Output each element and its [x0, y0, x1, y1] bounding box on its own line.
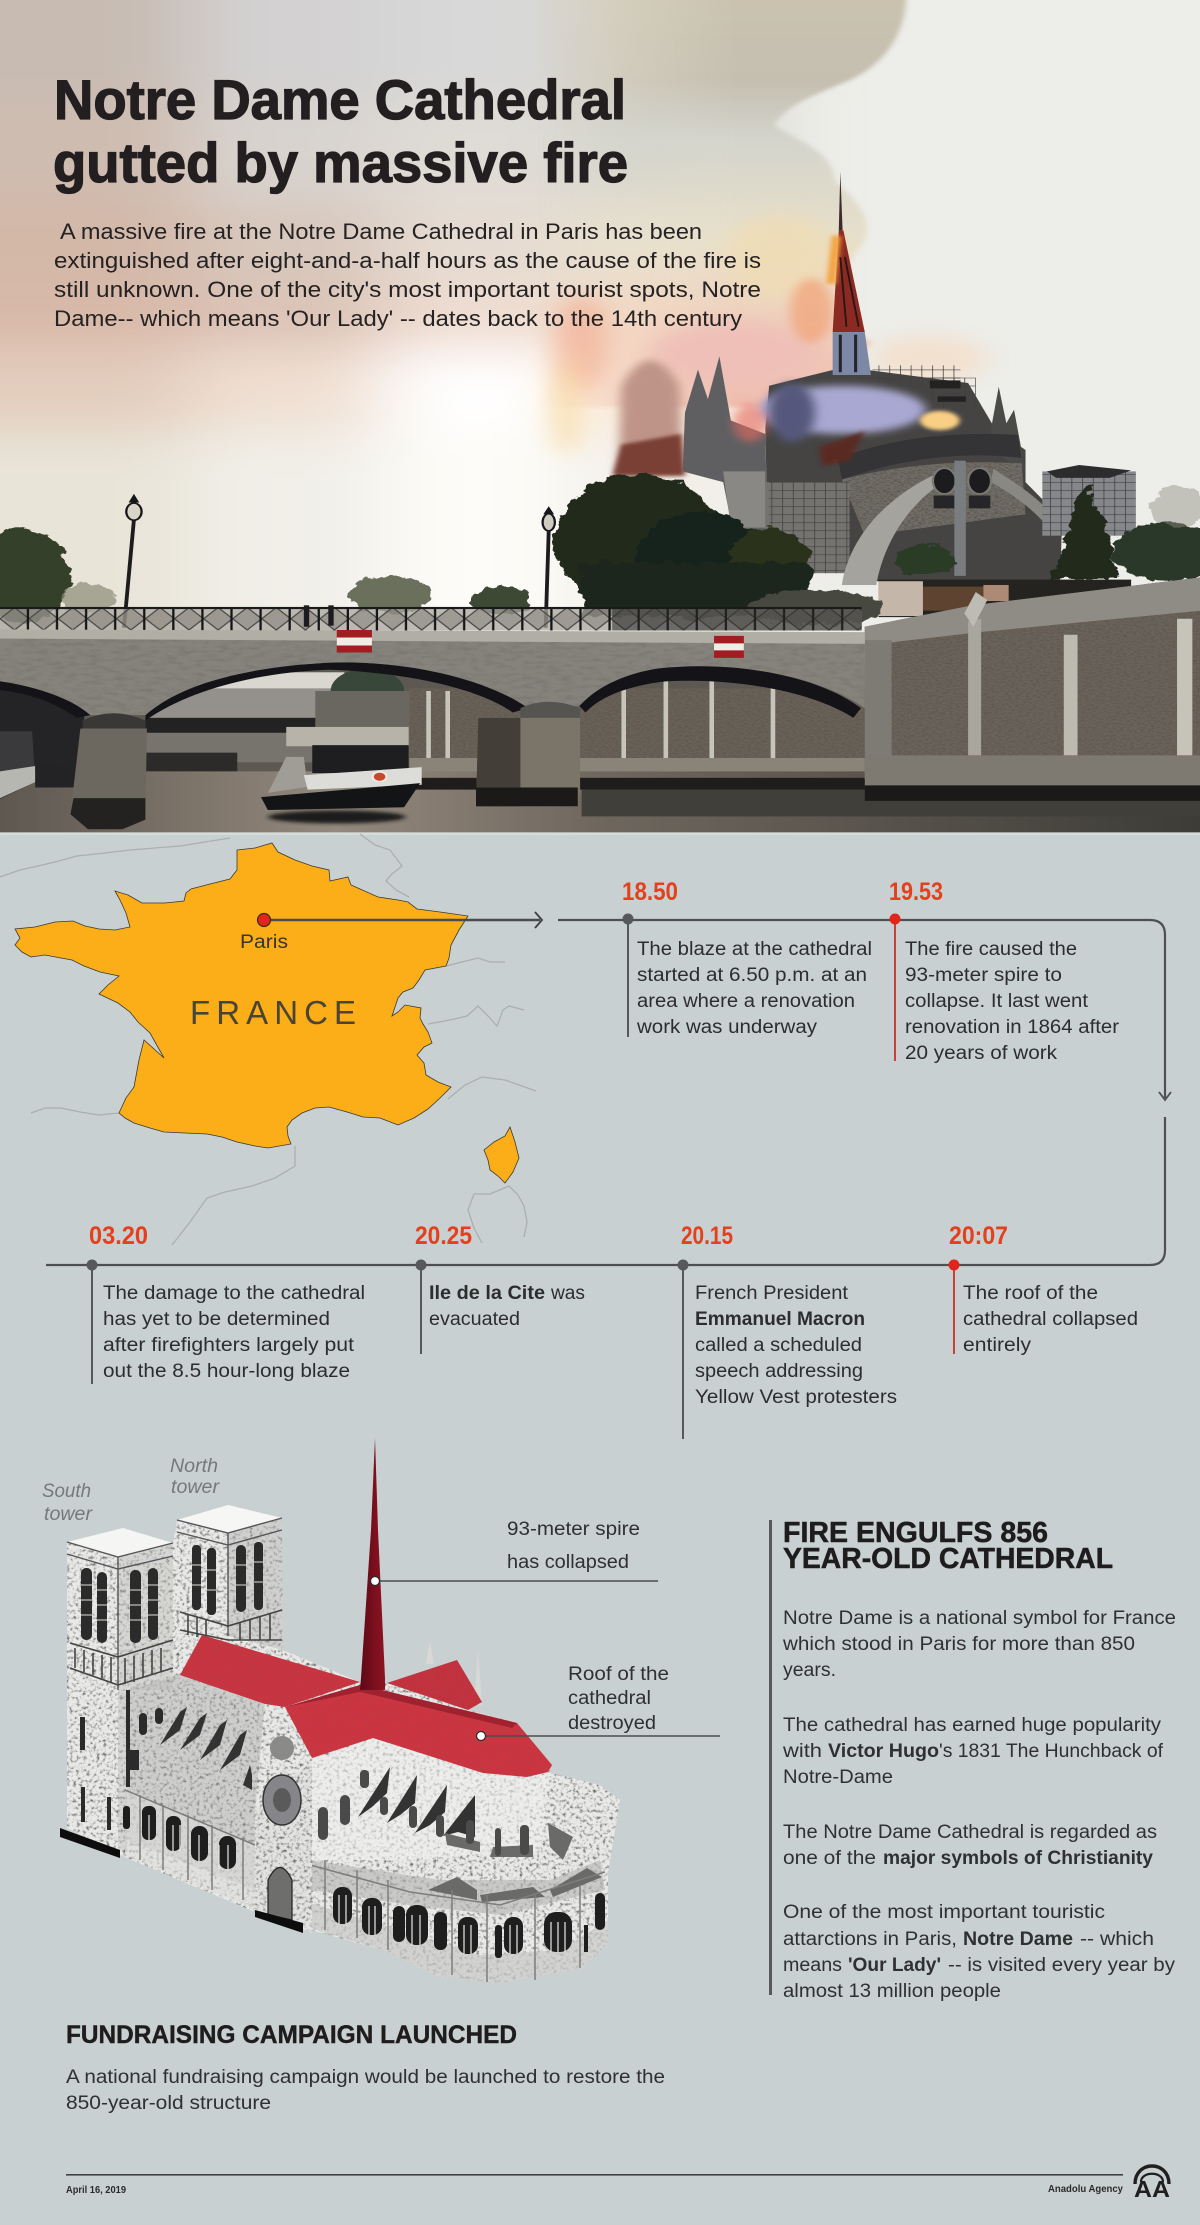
cathedral illustration	[60, 1438, 620, 1983]
timeline event 18.50: work was underway	[636, 1017, 818, 1038]
timeline event 19.53: 20 years of work	[905, 1043, 1058, 1064]
photo bottom edge	[0, 832, 1200, 835]
title: Notre Dame Cathedral	[54, 68, 626, 131]
roof ridge shadows	[285, 1685, 517, 1728]
tower outlines	[67, 1518, 282, 1690]
side panel heading	[783, 1517, 1113, 1575]
timeline event 03.20: has yet to be determined	[103, 1309, 330, 1330]
fundraising text: 850-year-old structure	[66, 2093, 271, 2114]
choir flying buttress gaps	[358, 1767, 475, 1837]
tower labels: tower	[44, 1503, 94, 1525]
timeline event 18.50: started at 6.50 p.m. at an	[637, 965, 867, 986]
intro text: still unknown. One of the city's most important tourist spots, Notre	[54, 277, 761, 302]
hero photo: cathedral on fire seen from the Seine	[0, 0, 1200, 833]
nave lower band	[125, 1790, 255, 1910]
timeline event 19.53: renovation in 1864 after	[905, 1017, 1120, 1038]
side panel paragraphs	[782, 1608, 1176, 2002]
bridge with arches and piers	[0, 607, 865, 829]
callout: roof: Roof of the	[568, 1664, 669, 1685]
timeline event 20.15: speech addressing	[695, 1361, 863, 1382]
tower labels	[42, 1455, 221, 1525]
fundraising text: A national fundraising campaign would be launched to restore the	[66, 2067, 665, 2088]
callout: spire: has collapsed	[507, 1552, 629, 1573]
fundraising text	[66, 2067, 665, 2114]
burning cathedral	[612, 171, 1136, 585]
timeline event 03.20: 03.20	[89, 1222, 148, 1250]
stone body	[67, 1505, 620, 1983]
tower windows	[80, 1542, 263, 1830]
paragraph: Victor Hugo: with	[782, 1741, 822, 1762]
paragraph: Victor Hugo	[782, 1715, 1164, 1788]
nave wall shading	[127, 1675, 265, 1890]
smoke plume with defined right edge	[579, 0, 909, 408]
timeline event 20:07: 20:07	[949, 1222, 1008, 1250]
intro text: extinguished after eight-and-a-half hours as the cause of the fire is	[54, 248, 761, 273]
spire	[360, 1438, 385, 1690]
timeline event 20:07: The roof of the	[963, 1283, 1098, 1304]
paragraph: tourist attraction: One of the most important touristic	[783, 1902, 1105, 1923]
timeline event 20.25: was	[550, 1283, 585, 1304]
paragraph: national symbol: Notre Dame is a national symbol for France	[783, 1608, 1176, 1629]
street lamps	[124, 494, 555, 628]
timeline event 18.50	[622, 878, 872, 1038]
callout: roof: cathedral	[568, 1688, 651, 1709]
paragraph: tourist attraction: Notre Dame	[963, 1929, 1073, 1950]
timeline event 20.15: Yellow Vest protesters	[695, 1387, 897, 1408]
window mullions	[149, 1815, 565, 1954]
timeline event 03.20: The damage to the cathedral	[103, 1283, 365, 1304]
central tree mass	[0, 474, 884, 625]
red roof: choir and south transept	[285, 1685, 552, 1777]
sheds behind quay	[879, 580, 1131, 617]
paragraph: Victor Hugo: Victor Hugo	[828, 1741, 939, 1762]
Paris marker and connector arrow	[240, 912, 542, 953]
timeline event 19.53	[889, 878, 1120, 1064]
intro text	[54, 219, 761, 331]
timeline event 03.20	[86, 1222, 365, 1384]
paragraph: symbols of Christianity: The Notre Dame Cathedral is regarded as	[783, 1822, 1157, 1843]
Paris marker and connector arrow: Paris	[240, 932, 288, 953]
timeline event 19.53: 19.53	[889, 878, 943, 906]
Anadolu Agency logo: AA	[1134, 2176, 1170, 2202]
paragraph: Victor Hugo: Notre-Dame	[783, 1767, 893, 1788]
timeline event 19.53: 93-meter spire to	[905, 965, 1062, 986]
river water	[0, 771, 1200, 833]
pedestrians on bridge	[304, 605, 334, 627]
paragraph: tourist attraction: almost 13 million people	[783, 1981, 1001, 2002]
intro text: A massive fire at the Notre Dame Cathedral in Paris has been	[60, 219, 702, 244]
timeline event 20.15: French President	[695, 1283, 849, 1304]
tower window louvres	[81, 1562, 263, 1620]
callout: spire	[370, 1519, 658, 1586]
paragraph: tourist attraction: 'Our Lady'	[848, 1955, 941, 1976]
Corsica	[484, 1127, 519, 1183]
fundraising heading: FUNDRAISING CAMPAIGN LAUNCHED	[66, 2021, 517, 2049]
timeline event 20.25: evacuated	[429, 1309, 520, 1330]
timeline event 20.15: 20.15	[681, 1222, 733, 1250]
footer rule	[66, 2174, 1123, 2176]
timeline event 20.25	[415, 1222, 585, 1354]
red roof: nave	[180, 1635, 360, 1707]
side panel heading: FIRE ENGULFS 856	[783, 1517, 1048, 1549]
title	[53, 68, 628, 194]
callout: spire: 93-meter spire	[507, 1519, 640, 1540]
paragraph: symbols of Christianity	[783, 1822, 1157, 1869]
paragraph: symbols of Christianity: one of the	[783, 1848, 876, 1869]
side panel rule	[769, 1520, 772, 1995]
tower galleries	[70, 1610, 282, 1685]
paragraph: symbols of Christianity: major symbols of Christianity	[883, 1848, 1153, 1869]
timeline event 20.15	[678, 1222, 897, 1439]
callout: roof: destroyed	[568, 1713, 656, 1734]
side panel heading: YEAR-OLD CATHEDRAL	[783, 1543, 1113, 1575]
smoke and glowing sky colour field	[0, 0, 765, 698]
timeline event 03.20: out the 8.5 hour-long blaze	[103, 1361, 350, 1382]
label: FRANCE: FRANCE	[190, 994, 356, 1031]
tower labels: tower	[171, 1476, 221, 1498]
paragraph: national symbol: which stood in Paris for more than 850	[782, 1634, 1135, 1655]
paragraph: tourist attraction: -- is visited every year by	[948, 1955, 1176, 1976]
stone river wall	[865, 577, 1200, 801]
nave flying buttress slashes	[160, 1707, 252, 1790]
timeline event 18.50: The blaze at the cathedral	[637, 939, 872, 960]
tower labels: South	[42, 1480, 91, 1502]
base shadows	[60, 1828, 303, 1933]
paragraph: tourist attraction: attarctions in Paris,	[783, 1929, 957, 1950]
timeline event 18.50: area where a renovation	[637, 991, 855, 1012]
timeline event 19.53: collapse. It last went	[905, 991, 1089, 1012]
small rear pinnacles	[426, 1640, 482, 1705]
intro text: Dame-- which means 'Our Lady' -- dates back to the 14th century	[54, 306, 743, 331]
paragraph: Victor Hugo: The cathedral has earned huge popularity	[783, 1715, 1162, 1736]
chapel and apse roofs	[428, 1823, 602, 1902]
date: April 16, 2019	[66, 2184, 126, 2196]
background through the arches	[0, 664, 869, 804]
timeline event 18.50: 18.50	[622, 878, 678, 906]
callout: roof	[476, 1664, 720, 1740]
paragraph: tourist attraction: -- which	[1080, 1929, 1154, 1950]
timeline event 20:07: entirely	[963, 1335, 1032, 1356]
upper choir windows	[318, 1770, 529, 1856]
north tower right face shading	[228, 1518, 283, 1650]
paragraph: tourist attraction: means	[783, 1955, 842, 1976]
apse base band	[300, 1900, 608, 1983]
timeline event 19.53: The fire caused the	[905, 939, 1077, 960]
paragraph: tourist attraction	[783, 1902, 1176, 2002]
timeline event 20.15: called a scheduled	[695, 1335, 862, 1356]
south tower right face shading	[118, 1543, 173, 1850]
title: gutted by massive fire	[53, 131, 628, 194]
timeline event 20:07: cathedral collapsed	[963, 1309, 1138, 1330]
tower labels: North	[170, 1455, 218, 1477]
red roof: north transept	[387, 1660, 482, 1710]
timeline event 20.25: 20.25	[415, 1222, 472, 1250]
transept facade	[255, 1736, 312, 1933]
paragraph: national symbol: years.	[783, 1660, 836, 1681]
agency credit: Anadolu Agency	[1048, 2183, 1123, 2195]
paragraph: Victor Hugo: 's 1831 The Hunchback of	[939, 1741, 1164, 1762]
lower arcade windows	[123, 1806, 605, 1958]
timeline event 20.25: Ile de la Cite	[429, 1283, 545, 1304]
facade pilasters	[125, 1790, 605, 1982]
timeline event 20.15: Emmanuel Macron	[695, 1309, 865, 1330]
choir wall shading	[312, 1738, 550, 1860]
map of France	[15, 843, 519, 1183]
paragraph: national symbol	[782, 1608, 1176, 1681]
Anadolu Agency logo	[1134, 2166, 1170, 2202]
timeline event 20:07	[948, 1222, 1138, 1356]
timeline event 03.20: after firefighters largely put	[103, 1335, 355, 1356]
neighbouring country borders	[0, 834, 536, 1245]
warm flame glow in the smoke	[549, 214, 987, 455]
river boats	[0, 727, 422, 810]
timeline path	[46, 920, 1171, 1265]
right-hand trees	[895, 482, 1200, 581]
